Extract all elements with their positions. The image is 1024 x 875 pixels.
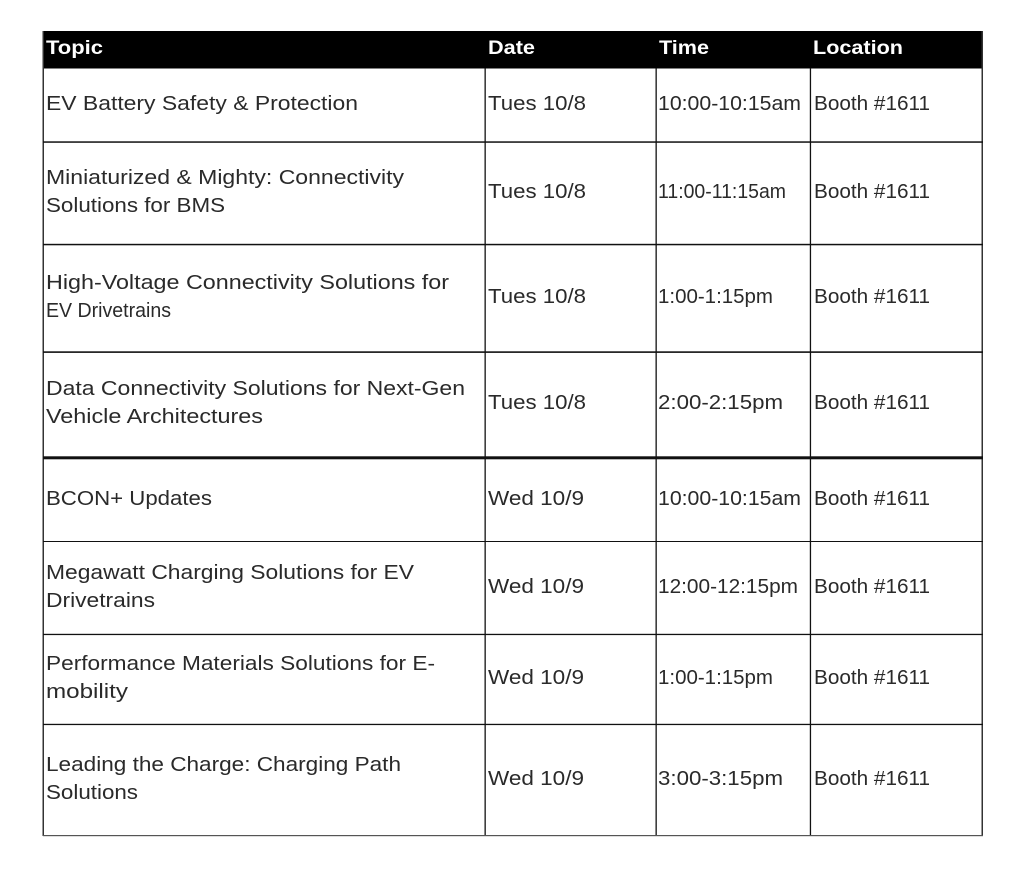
row: Megawatt Charging: Drivetrains <box>46 590 155 612</box>
row: Performance Materials: mobility <box>46 681 128 703</box>
table header: Time <box>659 37 709 59</box>
row: Data Connectivity: Data Connectivity Solutions for Next-Gen <box>46 378 465 400</box>
row: Miniaturized & Mighty: Tues 10/8 <box>488 181 586 203</box>
row: Miniaturized & Mighty: Solutions for BMS <box>46 195 225 217</box>
row: Leading the Charge: 3:00-3:15pm <box>658 768 783 790</box>
row: Megawatt Charging: Megawatt Charging Solutions for EV <box>46 562 415 584</box>
row: Data Connectivity <box>46 378 930 428</box>
row: High-Voltage Connectivity: EV Drivetrains <box>46 300 171 322</box>
row: Data Connectivity: Vehicle Architectures <box>46 406 263 428</box>
row: EV Battery Safety & Protection: EV Battery Safety & Protection <box>46 93 358 115</box>
row: Miniaturized & Mighty: 11:00-11:15am <box>658 181 786 203</box>
table header: Date <box>488 37 535 59</box>
row: EV Battery Safety & Protection: Tues 10/8 <box>488 93 586 115</box>
row: Leading the Charge <box>46 754 930 804</box>
row: Leading the Charge: Leading the Charge: Charging Path <box>46 754 401 776</box>
row: Leading the Charge: Solutions <box>46 782 138 804</box>
row: BCON+ Updates: 10:00-10:15am <box>658 488 801 510</box>
row: High-Voltage Connectivity: Tues 10/8 <box>488 286 586 308</box>
row: Miniaturized & Mighty: Miniaturized & Mighty: Connectivity <box>46 167 404 189</box>
row: EV Battery Safety & Protection: Booth #1611 <box>814 93 930 115</box>
row: Performance Materials <box>46 653 930 703</box>
row: High-Voltage Connectivity <box>46 272 930 322</box>
row: Leading the Charge: Wed 10/9 <box>488 768 584 790</box>
table header: Location <box>813 37 903 59</box>
row: Megawatt Charging <box>46 562 930 612</box>
row: High-Voltage Connectivity: High-Voltage Connectivity Solutions for <box>46 272 449 294</box>
row: High-Voltage Connectivity: 1:00-1:15pm <box>658 286 773 308</box>
row: Performance Materials: Performance Materials Solutions for E- <box>46 653 435 675</box>
row: Megawatt Charging: 12:00-12:15pm <box>658 576 798 598</box>
table header: Topic <box>46 37 103 59</box>
row: Miniaturized & Mighty <box>46 167 930 217</box>
row: BCON+ Updates: Booth #1611 <box>814 488 930 510</box>
row: EV Battery Safety & Protection: 10:00-10:15am <box>658 93 801 115</box>
row: BCON+ Updates: Wed 10/9 <box>488 488 584 510</box>
row: Performance Materials: Wed 10/9 <box>488 667 584 689</box>
row: Miniaturized & Mighty: Booth #1611 <box>814 181 930 203</box>
row: Data Connectivity: Tues 10/8 <box>488 392 586 414</box>
row: Megawatt Charging: Wed 10/9 <box>488 576 584 598</box>
table header <box>43 31 983 68</box>
row: Data Connectivity: Booth #1611 <box>814 392 930 414</box>
row: Megawatt Charging: Booth #1611 <box>814 576 930 598</box>
row: Performance Materials: 1:00-1:15pm <box>658 667 773 689</box>
row: BCON+ Updates: BCON+ Updates <box>46 488 212 510</box>
row: BCON+ Updates <box>46 488 930 510</box>
row: Performance Materials: Booth #1611 <box>814 667 930 689</box>
row: Leading the Charge: Booth #1611 <box>814 768 930 790</box>
row: EV Battery Safety & Protection <box>46 93 930 115</box>
row: High-Voltage Connectivity: Booth #1611 <box>814 286 930 308</box>
row: Data Connectivity: 2:00-2:15pm <box>658 392 783 414</box>
